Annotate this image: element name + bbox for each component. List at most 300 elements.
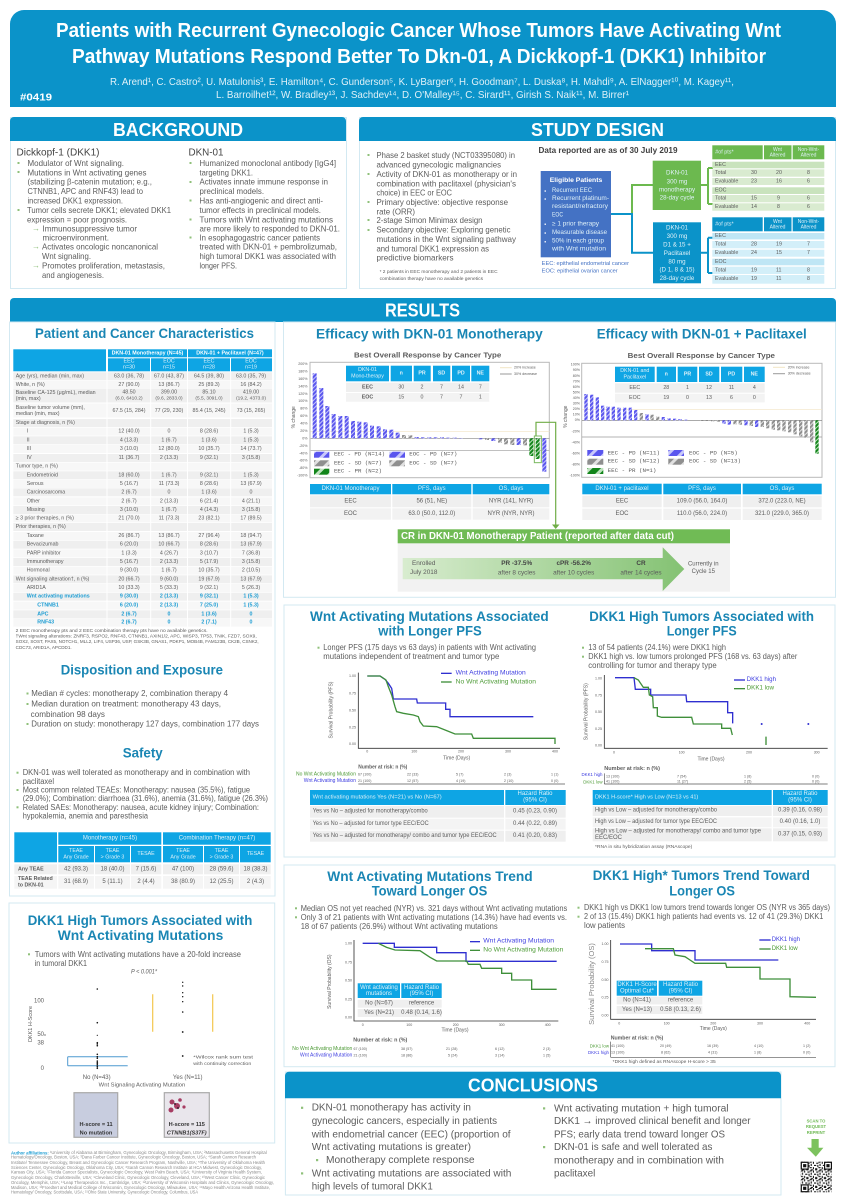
title: Patients with Recurrent Gynecologic Cancer Whose Tumors Have Activating Wnt (56, 20, 781, 42)
chart: DKK1 OS Kaplan-Meier: 0.50 (602, 978, 608, 982)
table: monotherapy counts: 30 (751, 170, 757, 176)
waterfall chart: monotherapy: -100% (297, 474, 308, 478)
text: DKN-01: high tumoral DKK1 was associated with (200, 251, 336, 261)
table: combination counts: 28 (751, 242, 757, 248)
chart legend: paclitaxel (587, 450, 741, 474)
table: paclitaxel PFS and OS: PFS, days (688, 486, 716, 492)
table: safety events: 42 (93.3) (64, 866, 88, 872)
connectors (611, 168, 713, 273)
table: patient characteristics: 419.00 (243, 390, 259, 396)
heading: Wnt PFS: with Longer PFS (377, 623, 482, 639)
table: patient characteristics: (min, max) (16, 396, 41, 402)
table: patient characteristics: 64.5 (39, 80) (194, 373, 224, 379)
text: Dickkopf-1: Mutations in Wnt activating genes (28, 167, 146, 177)
chart: Wnt OS Kaplan-Meier: 300 (499, 1023, 505, 1027)
text: Dickkopf-1: microenvironment. (42, 232, 109, 242)
table: patient characteristics: Missing (27, 507, 45, 513)
chart: Wnt PFS Kaplan-Meier: 0 (366, 750, 368, 754)
author affiliations: Institute/ Tennessee Oncology, Breast and Gynecologic Cancer Research Program, Nashville, USA; ⁵The University of Oklahoma Health (11, 1160, 266, 1165)
timeline labels: CR (636, 560, 646, 567)
table: combination counts: 8 (807, 267, 810, 273)
chart: DKK1 OS Kaplan-Meier: 4 (10) (754, 1044, 763, 1048)
table: patient characteristics: 8 (28.6) (200, 542, 218, 548)
inset table: DKK1 OS hazard ratio: Yes (N=13) (622, 1007, 652, 1013)
text: conclusions left column: Monotherapy complete response (326, 1154, 475, 1166)
inset table: DKK1 OS hazard ratio: 0.58 (0.13, 2.6) (660, 1007, 701, 1013)
table: patient characteristics: 73 (15, 265) (237, 408, 266, 414)
table footnotes: †Wnt signaling alterations: ZNRF3, RSPO2, RNF43, CTNNB1, AXIN1/2, APC, WISP3, TP53, TNIK, FZD7, SOX9, (16, 634, 257, 638)
table: patient characteristics: EEC (124, 359, 135, 365)
chart: DKK1 PFS Kaplan-Meier: DKK1 high (582, 772, 603, 777)
chart: DKK1 PFS Kaplan-Meier: 200 (746, 751, 752, 755)
chart: DKK1 OS Kaplan-Meier: Survival Probability (OS) (587, 943, 596, 1025)
table: safety events: TEAE (106, 848, 120, 854)
chart: Wnt PFS Kaplan-Meier: No Wnt Activating Mutation (456, 679, 536, 685)
table: Wnt PFS hazard ratios: 0.45 (0.23, 0.90) (513, 809, 557, 815)
QR code pattern (801, 1162, 832, 1192)
table: patient characteristics: 0 (168, 489, 171, 495)
table: paclitaxel PFS and OS: DKN-01 + paclitaxel (595, 486, 649, 492)
table: DKK1 PFS hazard ratios: Hazard Ratio (782, 791, 818, 797)
chart: DKK1 PFS Kaplan-Meier: 0 (0) (812, 774, 819, 778)
text: conclusions left column: with endometrial cancer (EEC) (proportion of (311, 1128, 511, 1140)
text: Dickkopf-1: increased DKK1 expression. (28, 196, 123, 206)
chart: DKK1 PFS Kaplan-Meier: Number at risk: n (%) (604, 766, 660, 772)
table: patient characteristics: 25 (89.3) (198, 382, 220, 388)
image: CTNNB1 histology (164, 1093, 209, 1137)
inset table: paclitaxel response counts: 13 (706, 395, 712, 401)
chart: Wnt OS Kaplan-Meier: No Wnt Activating Mutation (483, 947, 563, 953)
image: no mutation histology (74, 1093, 118, 1137)
chart: DKK1 OS Kaplan-Meier: 1 (2) (803, 1044, 810, 1048)
table: patient characteristics: 2 (13.3) (160, 603, 178, 609)
chart: DKK1 PFS Kaplan-Meier: DKK1 low (583, 780, 603, 784)
heading: DKK1 High Tumors Associated with (28, 912, 252, 928)
waterfall chart: paclitaxel: 10% (573, 413, 581, 417)
text: safety bullets: Related SAEs: Monotherapy: nausea, acute kidney injury; Combination: (23, 803, 259, 812)
chart: DKK1 PFS Kaplan-Meier: 0 (613, 751, 615, 755)
arm: combination box: DKN-01 (666, 224, 689, 231)
table: patient characteristics: 63.0 (36, 78) (114, 373, 144, 379)
table: safety events: TESAE (247, 851, 265, 857)
chart: DKK1 PFS Kaplan-Meier: DKK1 low (747, 686, 775, 692)
chart legend: paclitaxel: EEC - PR (N=1) (608, 468, 656, 474)
table: patient characteristics: n=30 (123, 365, 135, 371)
text: DKN-01: Activates innate immune response in (200, 177, 328, 187)
inset table: DKK1 OS hazard ratio (617, 981, 702, 1014)
table: monotherapy counts: 16 (776, 178, 782, 184)
table: monotherapy counts: 8 (777, 204, 780, 210)
table: patient characteristics: 48.50 (122, 390, 136, 396)
chart: Wnt PFS Kaplan-Meier: Time (Days) (443, 756, 471, 762)
text: conclusions right column: DKK1 → improved clinical benefit and longer (554, 1115, 751, 1127)
chart legend: thresholds: 20% increase (788, 365, 809, 369)
table: patient characteristics: 16 (84.2) (240, 382, 262, 388)
inset table: monotherapy response counts: 0 (421, 394, 424, 400)
text: safety bullets: (29.0%); Combination: diarrhoea (31.6%), anemia (31.6%), fatigue (26.3%) (23, 794, 268, 803)
text: study description bullets: Activity of DKN-01 as monotherapy or in (376, 169, 517, 179)
eligible patients box: EOC (552, 213, 564, 219)
inset table: monotherapy response counts: 2 (421, 384, 424, 390)
inset table: monotherapy response counts: Mono-therapy (351, 374, 384, 380)
table: combination counts: Evaluable (715, 250, 738, 256)
waterfall chart: paclitaxel: -40% (572, 440, 581, 444)
timeline labels: PR -37.5% (501, 560, 532, 567)
table: patient characteristics: 3 (15.8) (242, 507, 260, 513)
table: DKK1 PFS hazard ratios: DKK1 H-score* High vs Low (N=13 vs 41) (595, 794, 698, 800)
chart legend: monotherapy: EEC - PD (N=14) (334, 452, 385, 458)
table: combination counts: Total (715, 242, 726, 248)
table: monotherapy counts: 14 (751, 204, 757, 210)
waterfall chart: monotherapy: -40% (299, 451, 308, 455)
inset table: monotherapy response counts: 14 (458, 384, 464, 390)
table: patient characteristics: II (27, 437, 30, 443)
table: DKK1 PFS hazard ratios: (95% CI) (788, 798, 812, 804)
panel: DKK1 high tumors with Wnt mutations (9, 903, 275, 1143)
panel: conclusions (285, 1072, 781, 1195)
heading: Wnt Activating Mutations (58, 927, 224, 943)
table: safety events: 18 (38.3) (243, 866, 268, 872)
timeline arrow (403, 547, 684, 591)
chart: DKK1 OS Kaplan-Meier: 0.25 (602, 995, 608, 999)
inset table: paclitaxel response counts: 12 (706, 385, 712, 391)
arrow: responder to CR callout (536, 422, 560, 529)
author affiliations: Author affiliations: ¹University of Alabama at Birmingham, Gynecologic Oncology, Birmingham, USA; ²Massachusetts General Hospital (11, 1150, 267, 1155)
table: patient characteristics: 399.00 (161, 390, 177, 396)
table: patient characteristics: 9 (32.1) (200, 455, 218, 461)
table: patient characteristics: 0 (250, 620, 253, 626)
table: monotherapy counts: EOC (715, 188, 727, 194)
arm: combination box: 28-day cycle (660, 274, 695, 282)
heading: background: BACKGROUND (113, 120, 243, 140)
text: Wnt PFS bullet: mutations independent of treatment and tumor type (323, 652, 500, 661)
chart: Wnt OS Kaplan-Meier: Wnt Activating Mutation (300, 1052, 353, 1058)
table: monotherapy PFS and OS: NYR (NYR, NYR) (487, 511, 535, 517)
text: Wnt PFS bullet: Longer PFS (175 days vs 63 days) in patients with Wnt activating (323, 643, 536, 652)
author affiliations: Hematology/ Oncology, Scottsdale, USA; ¹⁵Ohio State University, Gynecologic Oncology, Columbus, USA (11, 1190, 198, 1194)
inset table: DKK1 OS hazard ratio: Hazard Ratio (663, 982, 699, 988)
chart: DKK1 PFS Kaplan-Meier: 0 (0) (812, 780, 819, 784)
author affiliations: Hematology/Oncology, Boston, USA; ³Dana Farber Cancer Institute, Gynecologic Oncology, Boston, USA; ⁴Sarah Cannon Research (11, 1154, 257, 1160)
text: conclusions left column: Wnt activating mutations are associated with (312, 1167, 512, 1179)
table: patient characteristics: Baseline tumor volume (mm), (16, 405, 85, 411)
chart: Wnt PFS Kaplan-Meier: 67 (100) (358, 773, 371, 777)
waterfall chart: paclitaxel: % change (563, 405, 569, 428)
inset table: DKK1 OS hazard ratio: Optimal Cut* (620, 988, 655, 994)
table: patient characteristics: Carcinosarcoma (27, 489, 65, 495)
chart: DKK1 OS Kaplan-Meier: 0 (618, 1021, 620, 1025)
table: safety events: 2 (4.4) (137, 879, 155, 885)
chart: DKK1 OS Kaplan-Meier: 1 (8) (754, 1051, 761, 1055)
text: Dickkopf-1: Activates oncologic noncanonical (42, 242, 158, 252)
table: patient characteristics: ≥ 3 prior therapies, n (%) (16, 515, 74, 521)
chart: DKK1 PFS Kaplan-Meier: 0.00 (595, 744, 602, 748)
table: monotherapy PFS and OS: 56 (51, NE) (416, 498, 447, 504)
text: study description bullets: combination with paclitaxel (physician's (376, 178, 516, 188)
heading: conclusions: CONCLUSIONS (468, 1076, 598, 1096)
table: monotherapy counts: Altered (770, 152, 786, 158)
chart: Wnt OS Kaplan-Meier: 400 (545, 1023, 551, 1027)
arm: combination box: (D 1, 8 & 15) (659, 266, 695, 273)
text: DKK1 PFS bullets: 13 of 54 patients (24.1%) were DKK1 high (588, 643, 726, 652)
inset table: paclitaxel response counts: NE (751, 371, 758, 377)
table: combination counts: 19 (751, 267, 757, 273)
table: combination counts: Altered (770, 224, 786, 230)
table: patient characteristics: EEC (204, 359, 215, 365)
text: DKN-01: tumor effects in preclinical models. (200, 205, 321, 215)
abbreviations legend: EEC: epithelial endometrial cancer (542, 261, 629, 267)
waterfall chart: paclitaxel: 90% (573, 368, 581, 372)
text: safety bullets: hypokalemia, anemia and paresthesia (23, 812, 149, 820)
table: patient characteristics: Baseline CA-125 (μg/mL), median (16, 390, 96, 396)
text: bullet (28, 950, 242, 968)
chart: Wnt OS Kaplan-Meier: 0.50 (345, 979, 352, 983)
table: patient characteristics: 13 (67.9) (240, 481, 262, 487)
chart: DKK1 PFS Kaplan-Meier: 41 (100) (606, 780, 619, 784)
text: DKN-01: DKN-01 (188, 148, 224, 158)
chart: Wnt PFS Kaplan-Meier: 21 (100) (358, 779, 371, 783)
heading: Wnt PFS (310, 608, 549, 639)
chart legend: paclitaxel: EOC - SD (N=13) (689, 459, 741, 465)
table: patient characteristics: 67.0 (43, 87) (154, 373, 184, 379)
timeline labels: July 2018 (410, 569, 438, 576)
table: patient characteristics: DKN-01 Monotherapy (N=45) (112, 350, 184, 356)
timeline labels: Cycle 15 (692, 569, 716, 575)
table: monotherapy PFS and OS (310, 484, 549, 520)
chart: DKK1 OS Kaplan-Meier: 100 (664, 1021, 670, 1025)
table: patient characteristics: 9 (32.1) (200, 472, 218, 478)
table: monotherapy counts: Total (715, 196, 726, 202)
table: patient characteristics: 3 (10.0) (120, 507, 138, 513)
chart: Wnt OS Kaplan-Meier: 5 (24) (448, 1053, 457, 1057)
chart: DKK1 OS Kaplan-Meier: 400 (804, 1021, 810, 1025)
chart: DKK1 OS Kaplan-Meier: 1.00 (602, 942, 608, 946)
table: monotherapy PFS and OS: EOC (344, 511, 358, 517)
chart: Wnt PFS Kaplan-Meier: 5 (7) (456, 773, 463, 777)
chart: Wnt OS Kaplan-Meier: Time (Days) (441, 1028, 469, 1034)
table: patient characteristics: 10 (66.7) (158, 542, 180, 548)
chart: DKK1 PFS Kaplan-Meier: 7 (54) (677, 774, 686, 778)
waterfall chart: paclitaxel: -80% (572, 463, 581, 467)
text: DKN-01: targeting DKK1. (200, 167, 253, 177)
table: patient characteristics: (19.2, 4373.0) (236, 395, 266, 401)
table: patient characteristics: Wnt activating mutations (27, 594, 90, 600)
text: study description bullets: Secondary objective: Exploring genetic (376, 225, 510, 235)
abbreviations legend: EOC: epithelial ovarian cancer (542, 268, 618, 274)
chart: Wnt PFS Kaplan-Meier: 300 (505, 750, 511, 754)
chart: DKK1 OS Kaplan-Meier: Number at risk: n (%) (611, 1035, 663, 1041)
author affiliations: Sciences Center, Gynecologic Oncology, Oklahoma City, USA; ⁶Sarah Cannon Research Institute at HCA Midwest, Gynecologic Oncology, (11, 1165, 262, 1170)
table: patient characteristics: 0 (168, 620, 171, 626)
waterfall chart: paclitaxel: -20% (572, 429, 581, 433)
table: patient characteristics: 1 (5.3) (243, 472, 259, 478)
chart: Wnt OS Kaplan-Meier (292, 939, 563, 1058)
table: patient characteristics: 9 (30.0) (120, 568, 138, 574)
table: patient characteristics: 2 (13.3) (160, 594, 178, 600)
text: Wnt PFS bullet (318, 643, 536, 661)
chart: Wnt PFS Kaplan-Meier: Survival Probability (PFS) (329, 681, 335, 738)
table: monotherapy PFS and OS: NYR (141, NYR) (489, 498, 533, 504)
eligible patients box: Eligible Patients (550, 177, 602, 184)
timeline labels (410, 560, 719, 576)
inset table: monotherapy response counts: 7 (460, 394, 463, 400)
table: Wnt PFS hazard ratios: Yes vs No – adjusted for monotherapy/combo (313, 809, 428, 815)
text: DKN-01 (188, 148, 340, 270)
table: Wnt PFS hazard ratios: 0.44 (0.22, 0.89) (513, 821, 557, 827)
table: combination counts: Non-Wnt- (798, 219, 820, 225)
results banner (10, 298, 836, 322)
heading: DKK1 OS: Longer OS (669, 883, 735, 899)
arm: combination box: 300 mg (667, 232, 688, 240)
chart: DKK1 H-score dot plot: DKK1 H-Score (28, 1006, 34, 1042)
table: safety events: to DKN-01 (18, 882, 44, 888)
arm: monotherapy box: monotherapy (659, 186, 696, 193)
table: combination counts: 11 (776, 276, 782, 282)
table: monotherapy counts: Total (715, 170, 726, 176)
text: Dickkopf-1: → (32, 261, 40, 270)
waterfall chart: monotherapy: 0% (302, 436, 308, 440)
chart: Wnt PFS Kaplan-Meier: 1 (1) (551, 773, 558, 777)
inset table: monotherapy response counts: 30 (398, 384, 404, 390)
waterfall chart: paclitaxel: -100% (570, 474, 581, 478)
table: monotherapy counts: 6 (807, 196, 810, 202)
table: patient characteristics: median (min, max) (16, 411, 60, 417)
table: patient characteristics: n=28 (203, 365, 215, 371)
text: conclusions right column: DKN-01 is safe and well tolerated as (554, 1141, 712, 1153)
inset table: paclitaxel response counts: SD (705, 371, 713, 377)
text: conclusions left column: Wnt activating mutations is greater) (312, 1141, 471, 1153)
chart: DKK1 H-score dot plot: 38 (37, 1040, 45, 1046)
text: study description bullets: * 2 patients in EEC monotherapy and 2 patients in EEC (380, 269, 498, 274)
table: patient characteristics: I (27, 429, 28, 435)
table: patient characteristics: 26 (86.7) (118, 533, 140, 539)
table: combination counts: 19 (751, 276, 757, 282)
table: combination counts: 15 (776, 250, 782, 256)
table: combination counts: Evaluable (715, 276, 738, 282)
table: patient characteristics: 5 (16.7) (120, 481, 138, 487)
table: combination counts: Total (715, 267, 726, 273)
table: patient characteristics: 8 (28.6) (200, 429, 218, 435)
authors: R. Arend¹, C. Castro², U. Matulonis³, E. Hamilton⁴, C. Gunderson⁵, K. LyBarger⁶, H. Goodman⁷, L. Duska⁸, H. Mahdi⁹, A. ElNagger¹⁰, M. Kagey¹¹, (110, 76, 734, 88)
chart: Wnt OS Kaplan-Meier: No Wnt Activating Mutation (292, 1046, 353, 1052)
table: patient characteristics: 63.0 (35, 79) (236, 373, 266, 379)
text: conclusions right column (543, 1102, 751, 1179)
inset table: paclitaxel response counts: 11 (729, 385, 734, 391)
table: patient characteristics: 67.5 (15, 284) (113, 408, 146, 414)
table: patient characteristics: 2 (13.3) (160, 455, 178, 461)
table: monotherapy PFS and OS: OS, days (499, 486, 523, 492)
poster number: #0419 (20, 92, 52, 104)
inset table: paclitaxel response counts: PD (728, 371, 735, 377)
table: patient characteristics: Serous (27, 481, 44, 487)
table: patient characteristics: Immunotherapy (27, 559, 64, 565)
table: monotherapy PFS and OS: PFS, days (418, 486, 446, 492)
text: study description bullets: Phase 2 basket study (NCT03395080) in (376, 150, 515, 160)
inset table: Wnt OS hazard ratio: Wnt activating (360, 985, 398, 991)
table: patient characteristics: 2 (7.1) (201, 620, 217, 626)
text: conclusions left column: DKN-01 monotherapy has activity in (312, 1102, 471, 1114)
chart: Wnt PFS Kaplan-Meier (296, 671, 565, 784)
author affiliations: Kansas City, USA; ⁷Florida Cancer Specialists, Gynecologic Oncology, West Palm Beach, USA; ⁸University of Virginia Health System, (11, 1170, 262, 1174)
inset table: DKK1 OS hazard ratio: No (N=41) (623, 998, 651, 1004)
chart: Wnt OS Kaplan-Meier: 21 (28) (446, 1047, 457, 1051)
text: DKN-01: treated with DKN-01 + pembrolizumab, (200, 242, 337, 252)
waterfall chart: monotherapy: 20% (300, 429, 308, 433)
table: Wnt PFS hazard ratios: Hazard Ratio (517, 791, 553, 797)
text: Dickkopf-1: Dickkopf-1 (DKK1) (16, 148, 100, 158)
inset table: paclitaxel response counts: 6 (730, 395, 733, 401)
chart: DKK1 PFS Kaplan-Meier: 100 (679, 751, 685, 755)
text: DKN-01: preclinical models. (200, 186, 264, 196)
image: CTNNB1 histology: H-score = 115 (169, 1122, 205, 1128)
table: patient characteristics: 3 (15.8) (242, 559, 260, 565)
text: DKK1 OS bullets: low patients (584, 921, 625, 930)
chart: DKK1 H-score dot plot: Wnt Signaling Activating Mutation (99, 1082, 185, 1088)
chart: DKK1 OS Kaplan-Meier: DKK1 low (590, 1044, 610, 1048)
table: Wnt PFS hazard ratios (310, 790, 566, 842)
text: DKN-01: longer PFS. (200, 260, 237, 270)
table: patient characteristics: 4 (14.3) (200, 507, 218, 513)
table: patient characteristics: 8 (28.6) (200, 481, 218, 487)
waterfall chart: monotherapy: -60% (299, 459, 308, 463)
chart: Wnt OS Kaplan-Meier: 18 (86) (401, 1053, 412, 1057)
table: DKK1 PFS hazard ratios: High vs Low – adjusted for tumor type EEC/EOC (595, 819, 718, 825)
chart legend: monotherapy: EEC - SD (N=7) (334, 460, 382, 466)
image: CTNNB1 histology: CTNNB1(S37F) (167, 1130, 207, 1136)
table: patient characteristics: 2 (6.7) (121, 498, 137, 504)
table: patient characteristics: RNF43 (37, 620, 54, 626)
inset table: paclitaxel response counts: PR (684, 371, 691, 377)
table: patient characteristics: 18 (60.0) (118, 472, 140, 478)
arm: combination box: D1 & 15 + (663, 241, 691, 248)
table: paclitaxel PFS and OS (582, 484, 822, 520)
text: disposition bullets: Duration on study: monotherapy 127 days, combination 177 days (31, 720, 259, 728)
table: monotherapy counts: EEC (715, 162, 726, 168)
text: study description bullets: mutations in the Wnt signaling pathway (376, 234, 517, 244)
chart: Wnt PFS Kaplan-Meier: 22 (33) (407, 773, 418, 777)
chart: Wnt PFS Kaplan-Meier: 200 (458, 750, 464, 754)
text: safety bullets: Most common related TEAEs: Monotherapy: nausea (35.5%), fatigue (23, 786, 251, 794)
inset table: paclitaxel response counts: n (665, 371, 668, 377)
authors (110, 76, 734, 101)
heading: Wnt OS: Wnt Activating Mutations Trend (327, 868, 533, 884)
image: no mutation histology: H-score = 11 (79, 1122, 113, 1128)
chart: DKK1 OS Kaplan-Meier: DKK1 low (772, 946, 798, 952)
chart legend: monotherapy: EOC - SD (N=7) (409, 460, 457, 466)
footnote: RNAscope: *RNA in situ hybridization assay (RNAscope) (595, 844, 693, 849)
table: patient characteristics: 1 (6.7) (161, 437, 177, 443)
chart title: paclitaxel: Best Overall Response by Cancer Type (628, 351, 775, 360)
chart: DKK1 OS Kaplan-Meier: 16 (39) (707, 1044, 718, 1048)
text: Dickkopf-1: Modulator of Wnt signaling. (28, 158, 124, 168)
chart: DKK1 OS Kaplan-Meier: 0 (0) (803, 1051, 810, 1055)
eligible patients box: ≥ 1 prior therapy (552, 221, 599, 227)
results banner: RESULTS (385, 300, 460, 320)
inset table: paclitaxel response counts (615, 367, 765, 402)
text: Wnt OS bullets: Only 3 of 21 patients with Wnt activating mutations (14.3%) have had events vs. (301, 913, 567, 922)
table: patient characteristics: 1 (6.7) (161, 568, 177, 574)
title (56, 20, 781, 68)
waterfall chart: paclitaxel: 50% (573, 390, 581, 394)
table: patient characteristics: Bevacizumab (27, 542, 59, 548)
table: monotherapy counts: 8 (807, 170, 810, 176)
text: conclusions left column: gynecologic cancers, especially in patients (312, 1115, 497, 1127)
table: patient characteristics: (9.6, 2833.0) (155, 395, 183, 401)
inset table: paclitaxel response counts: 4 (753, 385, 756, 391)
chart: DKK1 PFS Kaplan-Meier: 11 (27) (677, 780, 688, 784)
table: combination counts: 19 (776, 242, 782, 248)
inset table: paclitaxel response counts: DKN-01 and (620, 368, 649, 374)
